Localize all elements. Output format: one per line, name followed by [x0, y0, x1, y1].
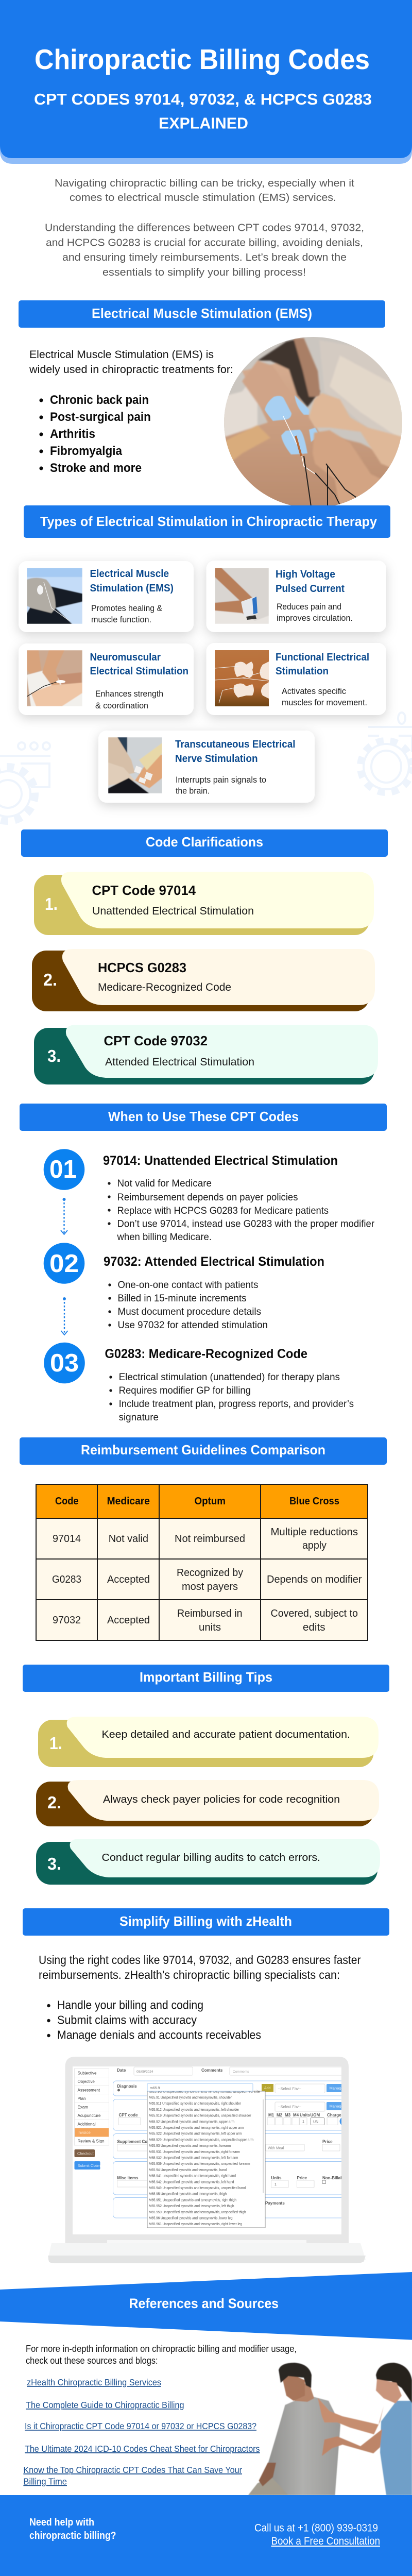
code name: CPT Code 97014 [92, 883, 196, 898]
form panels: Misc Items [117, 2176, 139, 2180]
form panels: Price [297, 2176, 307, 2180]
reference links: Billing Time [23, 2476, 67, 2486]
step 3 content: signature [119, 1412, 159, 1423]
form panels: Price [322, 2139, 333, 2144]
sidebar: Review & Sign [77, 2139, 105, 2143]
section heading: simplify billing: Simplify Billing with zHealth [119, 1913, 292, 1929]
table header: Code [55, 1496, 78, 1507]
diagnosis dropdown: M65.92 Unspecified synovitis and tenosynovitis, upper arm [149, 2119, 234, 2124]
diagnosis dropdown: M65.96 Unspecified synovitis and tenosynovitis, lower leg [149, 2215, 233, 2221]
form panels: Payments [265, 2201, 285, 2206]
diagnosis dropdown: M65.941 unspecified synovitis and tenosynovitis, right hand [149, 2174, 236, 2178]
card: high voltage [206, 561, 386, 632]
sidebar: Exam [77, 2105, 88, 2109]
form panels: Supplement Code [117, 2139, 152, 2144]
header banner [0, 0, 412, 164]
form panels: M3 [285, 2113, 291, 2117]
photo: chiropractor examining patient back [248, 2363, 412, 2495]
form panels: Units [300, 2113, 311, 2117]
simplify paragraph: reimbursements. zHealth’s chiropractic billing specialists can: [39, 1968, 340, 1981]
number: 2. [47, 1793, 61, 1812]
table header: Medicare [107, 1496, 150, 1507]
description [282, 687, 367, 707]
reference links: Know the Top Chiropractic CPT Codes That Can Save Your [23, 2465, 242, 2475]
EMS conditions list: Chronic back pain [50, 393, 149, 407]
tip text: Conduct regular billing audits to catch errors. [102, 1852, 320, 1863]
step 3 content: Include treatment plan, progress reports, and provider’s [119, 1399, 354, 1410]
number: 3. [47, 1046, 61, 1065]
step 1 content: Don’t use 97014, instead use G0283 with the proper modifier [117, 1219, 375, 1229]
diagnosis dropdown: m65.9 [150, 2087, 160, 2090]
heading [90, 652, 188, 677]
form panels: UN [313, 2121, 318, 2124]
tip 2 [36, 1780, 379, 1826]
code description: Attended Electrical Stimulation [105, 1056, 254, 1068]
references intro: check out these sources and blogs: [26, 2355, 158, 2366]
intro text: Navigating chiropractic billing can be tricky, especially when it [55, 177, 354, 189]
step 2 badge: 02 [49, 1250, 79, 1278]
code name: CPT Code 97032 [104, 1033, 208, 1048]
diagnosis dropdown: M65.919 Unspecified synovitis and tenosynovitis, unspecified shoulder [149, 2113, 251, 2118]
code description: Unattended Electrical Stimulation [92, 905, 254, 917]
sidebar [74, 2069, 109, 2170]
EMS conditions list: Arthritis [50, 427, 95, 441]
description: muscle function. [91, 615, 151, 624]
date and comments: Date [117, 2068, 126, 2073]
diagnosis dropdown [147, 2083, 265, 2228]
form panels: Units [271, 2176, 282, 2180]
form panels: --Select Fav-- [278, 2087, 301, 2091]
image: arm with cuff [215, 568, 269, 624]
form panels [113, 2081, 355, 2218]
section heading: EMS [19, 300, 385, 328]
description: Interrupts pain signals to [176, 775, 266, 785]
footer contact [254, 2522, 380, 2547]
diagnosis dropdown: M65.939 Unspecified synovitis and tenosynovitis, unspecified forearm [149, 2161, 250, 2166]
form panels: Diagnosis [117, 2084, 137, 2089]
number: 1. [49, 1734, 62, 1753]
number: 2. [43, 970, 57, 989]
row 97032 [53, 1608, 358, 1633]
arrow: step 1 to 2 [61, 1198, 67, 1234]
step 2 content: Use 97032 for attended stimulation [117, 1320, 268, 1331]
ribbon: references and sources [0, 2272, 412, 2340]
section heading: billing tips [23, 1665, 389, 1692]
footer call to action: chiropractic billing? [29, 2530, 116, 2541]
sidebar: Checkout [77, 2151, 94, 2156]
row 97032: Covered, subject to [271, 1608, 358, 1619]
intro text [45, 177, 364, 278]
form panels: --Select Fav-- [278, 2104, 301, 2109]
step 1 content: Replace with HCPCS G0283 for Medicare patients [117, 1206, 329, 1216]
description: Promotes healing & [91, 604, 162, 613]
intro text: essentials to simplify your billing process! [102, 266, 306, 278]
EMS description [29, 349, 233, 376]
form panels: With Meal [268, 2146, 284, 2150]
sidebar: Objective [77, 2079, 95, 2084]
heading: Stimulation (EMS) [90, 583, 174, 594]
simplify list: Submit claims with accuracy [57, 2013, 197, 2027]
form panels: Non-Billable [322, 2176, 347, 2180]
diagnosis dropdown: M65.95 Unspecified synovitis and tenosynovitis, thigh [149, 2192, 227, 2196]
date and comments: Comments [201, 2068, 223, 2073]
step 3 content: G0283: Medicare-Recognized Code [105, 1347, 307, 1361]
step 2 content [104, 1255, 324, 1331]
description [176, 775, 266, 795]
intro text: and ensuring timely reimbursements. Let’s break down the [62, 251, 347, 263]
row 97032: Accepted [107, 1615, 150, 1626]
form panels: 1 [302, 2120, 304, 2124]
heading [276, 652, 369, 677]
form panels: UOM [310, 2113, 320, 2117]
diagnosis dropdown: M65.929 Unspecified synovitis and tenosynovitis, unspecified upper arm [149, 2137, 253, 2142]
EMS conditions list: Post-surgical pain [50, 410, 151, 424]
footer [0, 2495, 412, 2576]
reimbursement comparison table [36, 1484, 368, 1640]
diagnosis dropdown: M65.951 Unspecified synovitis and tenosynovitis, right thigh [149, 2197, 236, 2202]
step 2 content: Must document procedure details [117, 1307, 261, 1317]
diagnosis dropdown: M65.961 Unspecified synovitis and tenosynovitis, right lower leg [149, 2222, 242, 2226]
sidebar: Assessment [77, 2088, 100, 2093]
code description: Medicare-Recognized Code [98, 981, 231, 993]
heading: High Voltage [276, 569, 335, 580]
date and comments [117, 2067, 348, 2075]
diagnosis dropdown: M65.931 Unspecified synovitis and tenosynovitis, right forearm [149, 2149, 240, 2154]
laptop mockup [48, 2057, 366, 2263]
row 97014: apply [302, 1540, 327, 1551]
form panels: Add [264, 2087, 271, 2090]
description: & coordination [95, 701, 148, 710]
step 1 badge: 01 [49, 1156, 77, 1183]
row 97032: 97032 [53, 1615, 81, 1626]
reference links: The Complete Guide to Chiropractic Billing [26, 2400, 184, 2410]
step 1 content: Reimbursement depends on payer policies [117, 1192, 298, 1203]
row 97014: Not valid [109, 1533, 148, 1545]
section heading: types: Types of Electrical Stimulation in Chiropractic Therapy [40, 514, 377, 529]
form panels: Manage [330, 2086, 344, 2091]
footer contact: Book a Free Consultation [271, 2535, 380, 2547]
section heading: reimbursement [20, 1437, 387, 1465]
step 3 badge [44, 1343, 85, 1383]
row G0283: Depends on modifier [267, 1574, 362, 1585]
section heading: types [24, 505, 390, 538]
EMS description: Electrical Muscle Stimulation (EMS) is [29, 349, 214, 361]
tip text: Always check payer policies for code recognition [103, 1793, 340, 1805]
heading: Transcutaneous Electrical [175, 739, 296, 750]
heading: Neuromuscular [90, 652, 161, 663]
step 2 content: Billed in 15-minute increments [117, 1293, 246, 1304]
step 3 content: Electrical stimulation (unattended) for therapy plans [119, 1372, 340, 1383]
image: forearm electrodes [108, 737, 162, 793]
footer call to action: Need help with [29, 2516, 94, 2528]
diagnosis dropdown: M65.922 Unspecified synovitis and tenosynovitis, left upper arm [149, 2131, 242, 2136]
reference links [23, 2377, 260, 2486]
photo: electrodes on neck [221, 335, 407, 510]
section heading: code clarifications [21, 829, 388, 857]
form panels: M1 [268, 2113, 274, 2117]
step 3 badge: 03 [50, 1349, 79, 1377]
description [277, 602, 353, 623]
row G0283: most payers [182, 1581, 238, 1592]
description [91, 604, 162, 624]
reference links: zHealth Chiropractic Billing Services [27, 2377, 161, 2387]
sidebar: Plan [77, 2096, 86, 2101]
step 3 content [105, 1347, 354, 1423]
sidebar: Acupuncture [77, 2113, 101, 2118]
diagnosis dropdown: M65.93 Unspecified synovitis and tenosynovitis, forearm [149, 2143, 231, 2148]
form panels: M2 [277, 2113, 283, 2117]
code card 2 [32, 949, 375, 1011]
step 1 content: 97014: Unattended Electrical Stimulation [103, 1154, 338, 1168]
card: neuromuscular [19, 643, 194, 715]
description [95, 689, 163, 710]
sidebar: Submit Claim [77, 2163, 100, 2168]
step 1 content: when billing Medicare. [117, 1232, 212, 1243]
diagnosis dropdown: M65.952 Unspecified synovitis and tenosynovitis, left thigh [149, 2204, 234, 2208]
diagnosis dropdown: M65.959 Unspecified synovitis and tenosynovitis, unspecified thigh [149, 2210, 246, 2214]
description: Enhances strength [95, 689, 163, 699]
form panels: CPT code [118, 2113, 138, 2117]
date and comments: 05/09/2024 [136, 2070, 153, 2074]
step 3 content: Requires modifier GP for billing [119, 1385, 251, 1396]
code card 3 [34, 1025, 378, 1084]
tip 1 [38, 1717, 379, 1767]
description: Reduces pain and [277, 602, 341, 612]
heading: Functional Electrical [276, 652, 369, 663]
number: 3. [47, 1854, 61, 1873]
heading: Electrical Stimulation [90, 666, 188, 677]
simplify paragraph [39, 1953, 361, 1981]
diagnosis dropdown: M65.942 Unspecified synovitis and tenosynovitis, left hand [149, 2179, 234, 2184]
ribbon: references and sources: References and Sources [129, 2296, 279, 2311]
section heading: EMS: Electrical Muscle Stimulation (EMS) [92, 306, 312, 321]
section heading: when to use: When to Use These CPT Codes [108, 1109, 299, 1124]
references intro: For more in-depth information on chiropractic billing and modifier usage, [26, 2344, 297, 2354]
row 97032: Reimbursed in [177, 1608, 242, 1619]
EMS conditions list: Fibromyalgia [50, 444, 123, 458]
title: Chiropractic Billing Codes [35, 43, 370, 75]
code card 1 [34, 872, 374, 935]
step 1 badge [44, 1149, 84, 1190]
form panels: Manage [330, 2104, 344, 2108]
code name: HCPCS G0283 [98, 960, 186, 975]
row G0283 [52, 1567, 362, 1592]
row 97014: Not reimbursed [175, 1533, 245, 1545]
EMS conditions list: Stroke and more [50, 461, 142, 475]
simplify paragraph: Using the right codes like 97014, 97032, and G0283 ensures faster [39, 1953, 361, 1967]
reference links: Is it Chiropractic CPT Code 97014 or 97032 or HCPCS G0283? [25, 2421, 256, 2431]
heading: Stimulation [276, 666, 329, 677]
image: electrode pads on back [215, 650, 269, 706]
EMS description: widely used in chiropractic treatments for: [29, 364, 233, 376]
section heading: code clarifications: Code Clarifications [146, 834, 263, 850]
step 1 content [103, 1154, 375, 1243]
subtitle: EXPLAINED [159, 114, 248, 132]
image: knee electrode [27, 568, 82, 624]
section heading: reimbursement: Reimbursement Guidelines Comparison [81, 1442, 325, 1458]
heading [276, 569, 345, 595]
step 2 badge [44, 1243, 84, 1284]
diagnosis dropdown: M65.921 Unspecified synovitis and tenosynovitis, right upper arm [149, 2125, 244, 2130]
description: improves circulation. [277, 614, 353, 623]
image: hands on back [27, 650, 82, 706]
diagnosis dropdown: M65.949 Unspecified synovitis and tenosynovitis, unspecified hand [149, 2185, 246, 2190]
step 2 content: 97032: Attended Electrical Stimulation [104, 1255, 324, 1269]
heading [175, 739, 296, 765]
sidebar: Invoice [77, 2130, 91, 2135]
heading [90, 568, 174, 594]
card: TENS [98, 731, 315, 803]
simplify list: Manage denials and accounts receivables [57, 2028, 261, 2041]
reference links: The Ultimate 2024 ICD-10 Codes Cheat Sheet for Chiropractors [25, 2444, 260, 2454]
section heading: simplify billing [23, 1908, 389, 1936]
diagnosis dropdown: M65.94 Unspecified synovitis and tenosynovitis, hand [149, 2167, 227, 2172]
diagnosis dropdown: M65.932 Unspecified synovitis and tenosynovitis, left forearm [149, 2156, 238, 2160]
form panels: M4 [293, 2113, 299, 2117]
card: functional [206, 643, 386, 715]
billing software screenshot [74, 2067, 355, 2228]
simplify list [47, 1998, 261, 2041]
step 2 content: One-on-one contact with patients [117, 1280, 259, 1291]
simplify list: Handle your billing and coding [57, 1998, 203, 2011]
subtitle [34, 90, 372, 132]
footer contact: Call us at +1 (800) 939-0319 [254, 2522, 378, 2534]
heading: Nerve Stimulation [175, 753, 258, 765]
section heading: billing tips: Important Billing Tips [140, 1669, 272, 1685]
tip 3 [36, 1839, 380, 1885]
step 1 content: Not valid for Medicare [117, 1178, 212, 1189]
card: EMS [19, 561, 194, 632]
background gear: left [0, 742, 50, 821]
footer call to action [29, 2516, 116, 2541]
heading: Pulsed Current [276, 583, 345, 595]
description: Activates specific [282, 687, 346, 696]
description: the brain. [176, 786, 210, 795]
row 97014: 97014 [53, 1533, 81, 1545]
sidebar: Subjective [77, 2071, 97, 2075]
diagnosis dropdown: M65.91 Unspecified synovitis and tenosynovitis, shoulder [149, 2095, 232, 2100]
row 97032: units [199, 1622, 221, 1633]
intro text: and HCPCS G0283 is crucial for accurate billing, avoiding denials, [46, 237, 363, 248]
number: 1. [45, 894, 58, 913]
EMS conditions list [39, 393, 151, 475]
heading: Electrical Muscle [90, 568, 169, 580]
table header: Optum [195, 1496, 226, 1507]
section heading: when to use [20, 1104, 387, 1131]
row 97032: edits [303, 1622, 325, 1633]
diagnosis dropdown: M65.912 Unspecified synovitis and tenosynovitis, left shoulder [149, 2107, 239, 2112]
diagnosis dropdown: M65.90 Unspecified synovitis and tenosynovitis, unspecified site [149, 2089, 260, 2094]
references intro [26, 2344, 297, 2366]
sidebar: Additional [77, 2122, 96, 2127]
intro text: Understanding the differences between CPT codes 97014, 97032, [45, 222, 364, 234]
arrow: step 2 to 3 [61, 1297, 68, 1335]
form panels: 1 [274, 2183, 277, 2187]
tip text: Keep detailed and accurate patient documentation. [102, 1728, 350, 1740]
subtitle: CPT CODES 97014, 97032, & HCPCS G0283 [34, 90, 372, 108]
row G0283: Accepted [107, 1574, 150, 1585]
description: muscles for movement. [282, 698, 367, 707]
table header [55, 1496, 339, 1507]
row G0283: Recognized by [177, 1567, 243, 1579]
intro text: comes to electrical muscle stimulation (EMS) services. [70, 192, 336, 204]
row G0283: G0283 [52, 1574, 81, 1585]
form panels: Charges [327, 2113, 344, 2117]
date and comments: Comments [233, 2070, 249, 2074]
row 97014 [53, 1527, 358, 1551]
diagnosis dropdown: M65.911 Unspecified synovitis and tenosynovitis, right shoulder [149, 2101, 241, 2106]
background gear: right [360, 713, 412, 792]
row 97014: Multiple reductions [271, 1527, 358, 1538]
table header: Blue Cross [289, 1496, 339, 1507]
